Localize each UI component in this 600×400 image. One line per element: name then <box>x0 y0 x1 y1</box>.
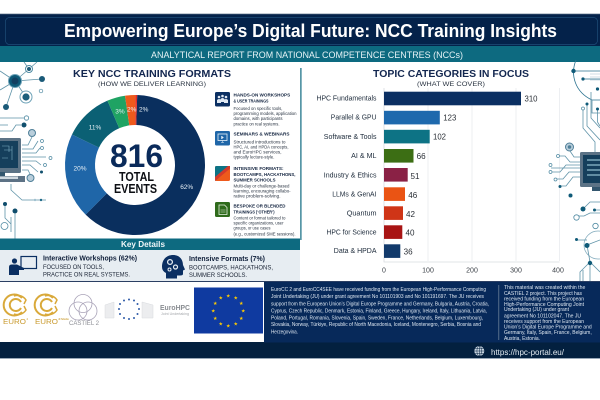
subtitle band <box>0 46 600 62</box>
icon: people workshop <box>215 92 230 106</box>
icon: globe <box>474 346 484 356</box>
format: hands-on workshops: HANDS-ON WORKSHOPS <box>234 93 290 98</box>
funding text: EuroCC: Slovakia, Norway, Türkiye, Republic of North Macedonia, Iceland, Montenegro, Serbia, Bosnia and <box>271 322 481 328</box>
left circuit decoration <box>0 62 52 240</box>
axis labels: 200 <box>466 268 478 274</box>
logo: EuroHPC wordmark <box>160 305 190 316</box>
format: seminars: Structured introductions to <box>234 139 286 144</box>
axis labels: 0 <box>382 268 386 274</box>
format: seminars: SEMINARS & WEBINARS <box>234 132 290 137</box>
bar: HPC for Science <box>326 225 415 239</box>
funding text: CASTIEL 2: This material was created within the <box>504 285 586 291</box>
heading: training formats <box>73 68 231 88</box>
donut chart: 62% <box>180 184 193 191</box>
funding text: EuroCC: Poland, Portugal, Romania, Slovenia, Spain, Sweden, France, Netherlands, Belgium, Luxembourg, <box>271 316 483 322</box>
format: intensive formats: rative problem-solving. <box>234 194 280 199</box>
detail: intensive formats <box>189 254 273 279</box>
bar: Parallel & GPU <box>331 111 457 124</box>
bar chart <box>316 88 564 274</box>
format: hands-on workshops: Focused on specific tools, <box>234 106 282 111</box>
bar: Data & HPDA: 36 <box>404 248 413 257</box>
key details heading bar <box>0 238 300 250</box>
bar: Quantum: Quantum <box>347 210 377 218</box>
format: hands-on workshops: domains, with participants <box>234 116 282 121</box>
logo: EU flag: ★ <box>211 308 216 314</box>
bar: LLMs & GenAI: LLMs & GenAI <box>332 192 377 198</box>
bar: Data & HPDA <box>334 244 413 258</box>
donut total: 816 <box>110 138 163 174</box>
logo: EU flag: ★ <box>234 322 239 328</box>
format: intensive formats: learning, encouraging collabo- <box>234 189 291 194</box>
icon: head with gears <box>162 255 185 278</box>
bar: LLMs & GenAI: 46 <box>408 191 418 200</box>
funding text: CASTIEL 2: CASTIEL 2 project. This project has <box>504 291 582 297</box>
bar: AI & ML: 66 <box>417 152 426 161</box>
axis labels: 400 <box>552 268 564 274</box>
donut total <box>110 138 163 196</box>
bar: Software & Tools <box>324 130 447 143</box>
donut total: TOTAL <box>119 170 154 184</box>
logo: EuroHPC wordmark: Joint Undertaking <box>161 312 189 316</box>
format: hands-on workshops <box>215 92 297 126</box>
format: intensive formats: INTENSIVE FORMATS: <box>234 166 284 171</box>
heading: topic categories: TOPIC CATEGORIES IN FOCUS <box>373 68 529 80</box>
logo: EU flag: ★ <box>226 324 231 330</box>
logos panel <box>0 282 264 342</box>
format: bespoke <box>215 202 296 237</box>
title: Empowering Europe’s Digital Future: NCC Training Insights <box>64 21 557 41</box>
format: bespoke: groups, or use cases <box>234 226 270 231</box>
logo: EuroCC 2 <box>3 294 28 326</box>
key details heading bar: Key Details <box>121 240 166 249</box>
format: hands-on workshops: programming models, application <box>234 111 297 116</box>
format: intensive formats: Multi-day or challenge-based <box>234 184 290 189</box>
logo: EuroHPC building <box>105 298 153 320</box>
format: seminars: typically lecture-style. <box>234 155 274 160</box>
axis labels: 300 <box>510 268 522 274</box>
donut chart <box>73 106 193 222</box>
detail: intensive formats: BOOTCAMPS, HACKATHONS, <box>189 265 273 272</box>
heading: topic categories <box>373 68 529 88</box>
logo: EuroCC4SEE: EURO <box>35 319 59 326</box>
detail: intensive formats: Intensive Formats (7%) <box>189 254 265 263</box>
logo: EuroCC 2: 2 <box>26 317 28 321</box>
funding text: CASTIEL 2: Austria, Estonia. <box>504 336 540 342</box>
bar: HPC Fundamentals <box>316 92 538 105</box>
logo: EuroHPC wordmark: EuroHPC <box>160 305 190 312</box>
funding text: CASTIEL 2: Undertaking (JU) under grant <box>504 307 570 313</box>
format: hands-on workshops: & USER TRAININGS <box>234 98 268 103</box>
format: seminars: and EuroHPC services, <box>234 149 282 154</box>
bar: Quantum <box>347 206 416 220</box>
subtitle band: ANALYTICAL REPORT FROM NATIONAL COMPETENCE CENTRES (NCCs) <box>151 50 463 60</box>
bar: AI & ML: AI & ML <box>351 153 377 160</box>
logo: EU flag <box>194 288 263 334</box>
bar: HPC Fundamentals: HPC Fundamentals <box>316 96 377 103</box>
bar: Data & HPDA: Data & HPDA <box>334 248 377 255</box>
bar: Industry & Ethics <box>324 168 420 182</box>
funding text: EuroCC <box>271 287 489 336</box>
bar: Parallel & GPU: 123 <box>443 114 457 123</box>
bar: AI & ML <box>351 149 426 163</box>
funding text: CASTIEL 2: received funding from the European <box>504 297 584 303</box>
key details panel <box>0 250 300 281</box>
funding text: CASTIEL 2: Germany, Italy, Spain, France, Belgium, <box>504 330 592 336</box>
funding text panel <box>264 282 600 342</box>
detail: interactive workshops: PRACTICE ON REAL SYSTEMS. <box>43 271 130 278</box>
bar: HPC Fundamentals: 310 <box>524 94 538 104</box>
logo: EU flag: ★ <box>219 322 224 328</box>
detail: interactive workshops <box>43 254 137 278</box>
logo: EU flag: ★ <box>234 296 239 302</box>
logo: EU flag: ★ <box>219 296 224 302</box>
logo: EU flag: ★ <box>213 316 218 322</box>
bar: Parallel & GPU: Parallel & GPU <box>331 115 376 122</box>
funding text: CASTIEL 2: Union’s Digital Europe Programme and <box>504 325 592 331</box>
format: hands-on workshops: practice on real systems. <box>234 121 280 126</box>
logo: EU flag: ★ <box>241 308 246 314</box>
icon: document <box>215 202 230 217</box>
header banner <box>0 14 600 46</box>
format: intensive formats: SUMMER SCHOOLS <box>234 178 276 183</box>
icon: presenter at board <box>9 256 36 275</box>
axis labels <box>382 268 564 274</box>
format: bespoke: specific organizations, user <box>234 220 284 225</box>
donut total: EVENTS <box>114 182 157 196</box>
logo: CASTIEL 2 <box>69 294 100 327</box>
logo: EU flag: ★ <box>239 316 244 322</box>
format: bespoke: Content or format tailored to <box>234 215 286 220</box>
bar: Industry & Ethics: 51 <box>410 172 420 181</box>
bar: LLMs & GenAI <box>332 187 418 201</box>
donut chart: 20% <box>73 166 87 172</box>
logo: EU flag: ★ <box>213 301 218 307</box>
donut chart: 2% <box>139 106 149 114</box>
bar: Quantum: 42 <box>406 210 416 219</box>
bar: HPC for Science: 40 <box>406 229 415 238</box>
logo: EuroCC4SEE: 4SEE <box>58 317 69 321</box>
axis labels: 100 <box>422 268 434 274</box>
funding text: EuroCC: Herzegovina. <box>271 330 298 336</box>
format: intensive formats: BOOTCAMPS, HACKATHONS, <box>234 172 296 177</box>
funding text: CASTIEL 2: High-Performance Computing Joint <box>504 302 585 308</box>
logo: CASTIEL 2: CASTIEL 2 <box>69 321 100 327</box>
format: seminars: HPC, AI, and HPDA concepts, <box>234 144 288 149</box>
panel divider <box>300 68 302 240</box>
bar: Software & Tools: Software & Tools <box>324 134 377 141</box>
logo: EuroCC 2: EURO <box>3 319 27 326</box>
detail: intensive formats: SUMMER SCHOOLS. <box>189 272 247 279</box>
funding text: EuroCC: EuroCC 2 and EuroCC4SEE have received funding from the European High-Performance Computing <box>271 287 486 293</box>
footer bar <box>0 342 600 359</box>
donut chart: 11% <box>89 124 101 132</box>
logo: EuroCC4SEE <box>35 294 69 326</box>
navy rule <box>0 281 600 282</box>
detail: interactive workshops: FOCUSED ON TOOLS, <box>43 264 104 271</box>
bar: Industry & Ethics: Industry & Ethics <box>324 172 377 179</box>
donut chart: 3% <box>115 108 125 116</box>
logo: EU flag: ★ <box>239 301 244 307</box>
format: seminars <box>215 131 290 160</box>
icon: intensive stripes <box>215 166 230 181</box>
format: bespoke: BESPOKE OR BLENDED <box>234 203 286 208</box>
bar: Software & Tools: 102 <box>433 133 447 142</box>
donut chart: 2% <box>127 106 137 114</box>
right circuit decoration <box>549 60 600 281</box>
funding text: CASTIEL 2: agreement No 101102047. The JU <box>504 313 581 319</box>
heading: training formats: KEY NCC TRAINING FORMATS <box>73 68 231 80</box>
funding text: EuroCC: Cyprus, Czech Republic, Denmark, Estonia, Finland, Greece, Hungary, Ireland, Italy, Lithuania, Latvia, <box>271 308 487 314</box>
funding text: CASTIEL 2 <box>504 285 592 342</box>
bar: HPC for Science: HPC for Science <box>326 229 377 236</box>
heading: training formats: (HOW WE DELIVER LEARNING) <box>98 81 206 88</box>
format: intensive formats <box>215 166 296 199</box>
format: bespoke: TRAININGS (‘OTHER’) <box>234 210 275 215</box>
icon: screen <box>215 131 230 146</box>
detail: interactive workshops: Interactive Workshops (62%) <box>43 254 137 262</box>
logo: EU flag: ★ <box>226 294 231 300</box>
url: https://hpc-portal.eu/ <box>491 347 565 357</box>
funding text: EuroCC: support from the European Union’s Digital Europe Programme and Germany, Bulgaria, Austria, Croatia, <box>271 302 489 308</box>
format: bespoke: (e.g., customized SME sessions). <box>234 232 296 237</box>
heading: topic categories: (WHAT WE COVER) <box>417 81 485 88</box>
funding text: CASTIEL 2: receives support from the European <box>504 319 584 325</box>
funding text: EuroCC: Joint Undertaking (JU) under grant agreement No 101101903 and No 101191697. The JU receives <box>271 294 484 300</box>
